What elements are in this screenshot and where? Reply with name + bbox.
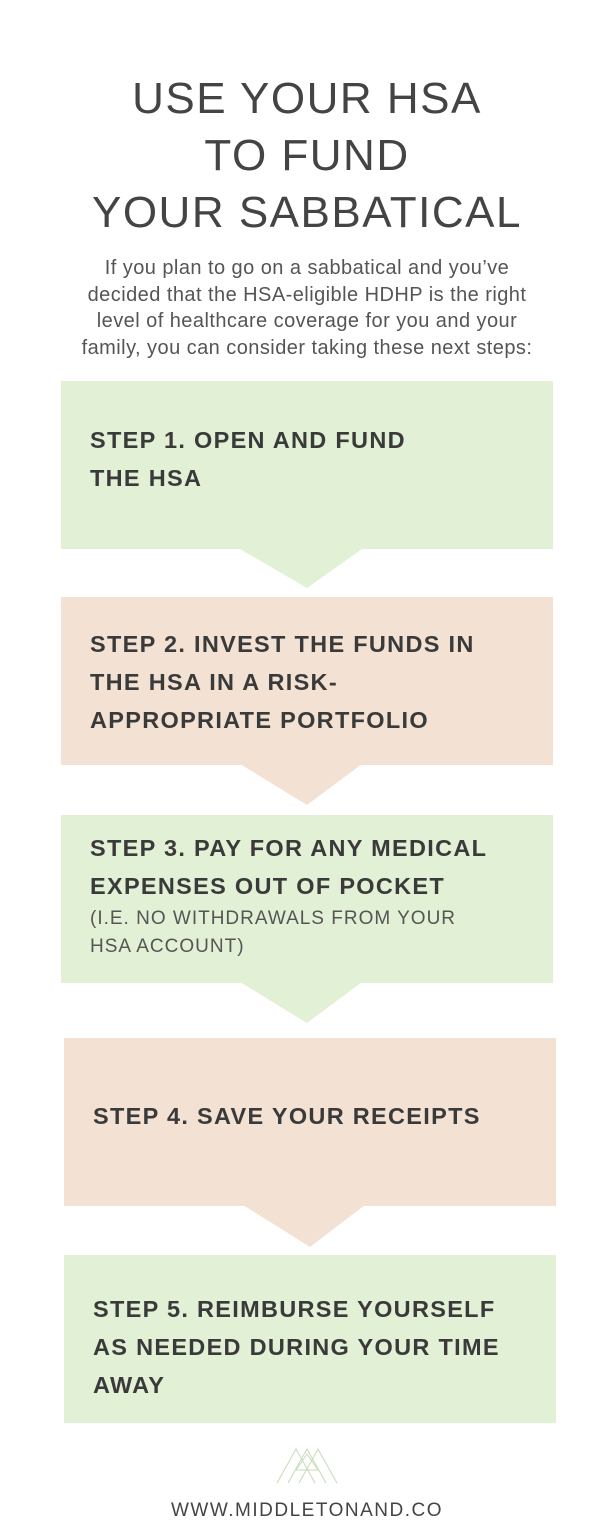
step 5: AWAY [93,1372,165,1398]
footer url: WWW.MIDDLETONAND.CO [171,1500,443,1521]
step 1: STEP 1. OPEN AND FUND [90,427,406,453]
step 2 [61,597,553,765]
intro text: decided that the HSA-eligible HDHP is the right [88,284,526,306]
intro text: level of healthcare coverage for you and your [97,310,517,332]
step 3: HSA ACCOUNT) [90,936,245,957]
step 4: STEP 4. SAVE YOUR RECEIPTS [93,1103,481,1129]
step 3: EXPENSES OUT OF POCKET [90,873,445,899]
step 4 [64,1038,556,1206]
title: TO FUND [204,131,410,180]
intro text: If you plan to go on a sabbatical and you’ve [105,257,509,279]
step 2: THE HSA IN A RISK- [90,669,338,695]
icon: logo [276,1448,338,1484]
step 1: THE HSA [90,465,202,491]
title [92,74,522,237]
step 5 [64,1255,556,1423]
step 2: STEP 2. INVEST THE FUNDS IN [90,631,475,657]
step 3: STEP 3. PAY FOR ANY MEDICAL [90,835,487,861]
step 1 [61,381,553,549]
intro text: family, you can consider taking these next steps: [82,336,532,358]
step 3: (I.E. NO WITHDRAWALS FROM YOUR [90,908,456,929]
step 5: STEP 5. REIMBURSE YOURSELF [93,1296,495,1322]
step 3 [61,815,553,983]
step 5: AS NEEDED DURING YOUR TIME [93,1334,500,1360]
step 2: APPROPRIATE PORTFOLIO [90,707,429,733]
title: USE YOUR HSA [132,74,482,123]
intro text [82,257,532,358]
title: YOUR SABBATICAL [92,188,522,237]
